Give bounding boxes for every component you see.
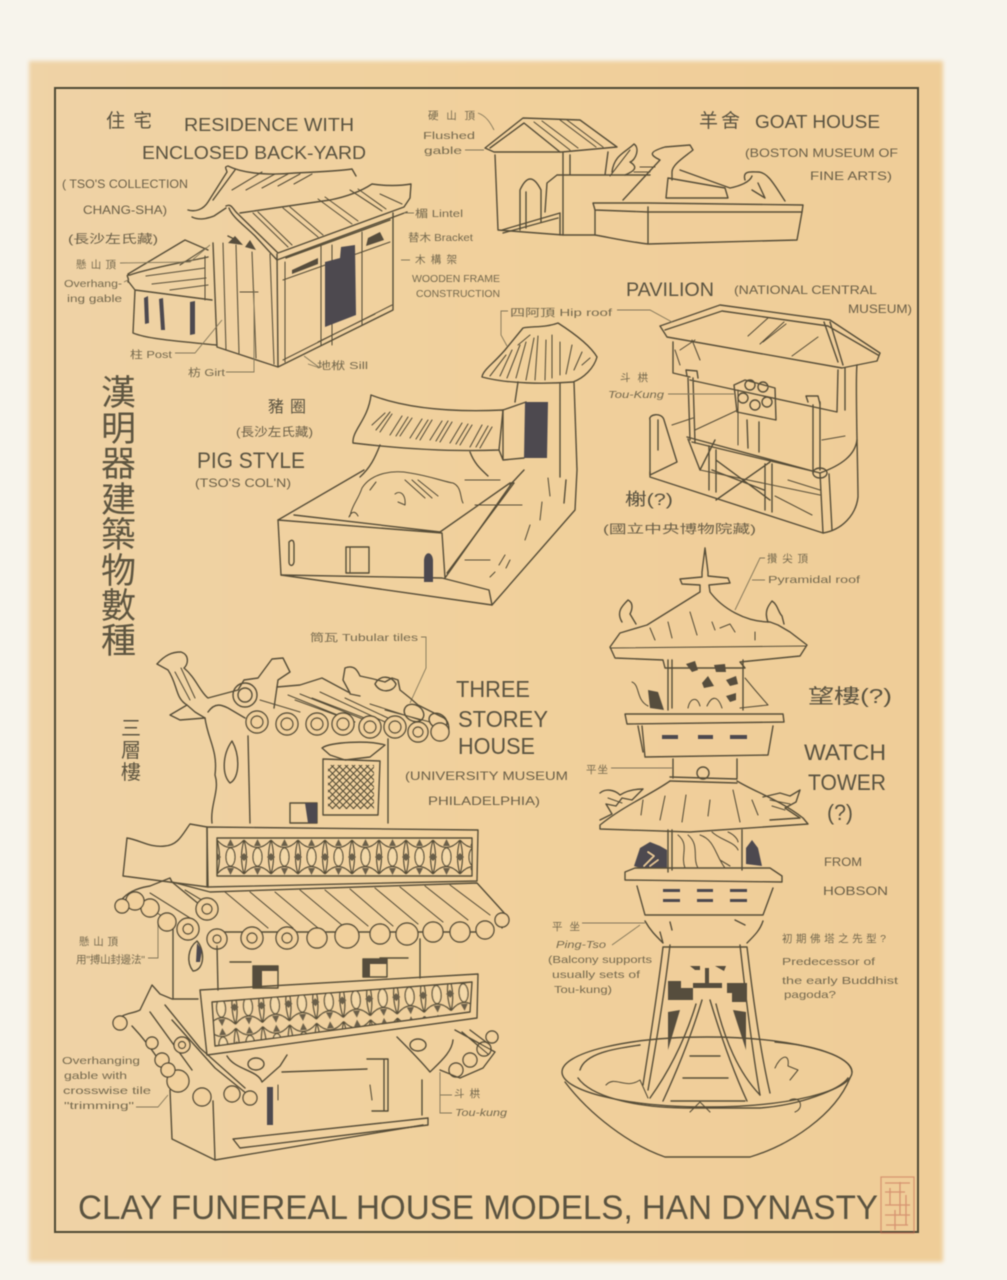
watch tower callouts: 攢尖頂 — [767, 552, 808, 565]
vertical chinese title: 數 — [101, 587, 136, 626]
pig style heading — [195, 398, 313, 490]
vertical chinese title: 器 — [101, 445, 136, 484]
three storey callouts: 斗栱 — [454, 1087, 480, 1100]
vertical chinese title: 明 — [101, 410, 136, 449]
pavilion callouts: (國立中央博物院藏) — [603, 521, 756, 536]
watch tower heading: WATCH — [804, 740, 886, 765]
watch tower callouts: Pyramidal roof — [768, 574, 860, 586]
hip roof callout: 四阿頂 Hip roof — [510, 307, 612, 319]
pavilion callouts: 斗栱 — [620, 371, 648, 384]
three storey label: vertical chinese: 樓 — [121, 761, 141, 784]
residence callouts: WOODEN FRAME — [412, 273, 500, 285]
residence callouts: 地栿 Sill — [317, 359, 368, 372]
middle wall — [173, 929, 420, 999]
lower balcony — [625, 868, 782, 882]
upper balcony — [625, 714, 784, 724]
lower roof and base — [113, 985, 498, 1160]
watch tower drawing — [562, 548, 852, 1157]
pig style heading: 豬圈 — [268, 398, 306, 416]
vertical chinese title: 種 — [101, 622, 136, 661]
three storey heading: PHILADELPHIA) — [428, 794, 540, 808]
heading: goat house: FINE ARTS) — [810, 169, 892, 183]
three storey callouts — [62, 632, 507, 1119]
residence callouts: 替木 Bracket — [408, 231, 473, 244]
pavilion callouts: Tou-Kung — [608, 389, 664, 401]
residence callouts: Overhang- — [64, 278, 123, 290]
three storey heading: STOREY — [458, 706, 548, 732]
residence callouts: 懸山頂 — [76, 258, 116, 271]
red seal — [881, 1177, 914, 1233]
vertical chinese title: 物 — [101, 552, 136, 591]
upper wall — [205, 718, 388, 823]
watch tower heading: FROM — [824, 855, 862, 869]
pavilion callouts — [603, 371, 756, 536]
residence source notes: (長沙左氏藏) — [68, 231, 158, 246]
residence source notes — [62, 177, 188, 246]
three storey callouts: gable with — [64, 1070, 127, 1082]
three storey label: vertical chinese: 三 — [121, 718, 141, 740]
three storey callouts: 懸山頂 — [79, 935, 118, 948]
residence callouts: ing gable — [67, 293, 122, 305]
pig style heading: PIG STYLE — [197, 448, 305, 473]
heading: residence: RESIDENCE WITH — [184, 115, 354, 135]
watch tower heading: TOWER — [808, 770, 886, 795]
vertical chinese title: 建 — [101, 481, 136, 520]
residence source notes: ( TSO'S COLLECTION — [62, 177, 188, 191]
residence callouts — [64, 207, 500, 379]
pavilion drawing — [650, 305, 880, 533]
watch tower callouts: 初期佛塔之先型? — [782, 932, 886, 945]
waist — [670, 759, 737, 783]
heading: residence — [106, 110, 366, 163]
middle roof — [115, 878, 509, 949]
three storey heading — [405, 676, 568, 808]
lower balcony — [200, 974, 478, 1055]
dish — [562, 1037, 852, 1107]
vertical chinese title — [101, 374, 136, 661]
watch tower callouts: the early Buddhist — [782, 975, 898, 987]
three storey callouts: "trimming" — [64, 1100, 134, 1112]
watch tower callouts: pagoda? — [784, 989, 836, 1001]
upper room — [668, 660, 743, 710]
three storey callouts: 筒瓦 Tubular tiles — [310, 632, 418, 644]
heading: residence: ENCLOSED BACK-YARD — [142, 143, 366, 163]
sheet content — [55, 88, 918, 1233]
pig style heading: (長沙左氏藏) — [236, 424, 313, 439]
watch tower heading: (?) — [827, 800, 853, 825]
pavilion heading: MUSEUM) — [848, 302, 912, 316]
watch tower callouts: Tou-kung) — [554, 984, 612, 996]
upper roof — [610, 548, 807, 668]
residence callouts: 枋 Girt — [188, 366, 225, 379]
watch tower callouts: usually sets of — [552, 969, 640, 981]
lower room — [668, 830, 742, 872]
goat house callouts: Flushed — [423, 130, 475, 142]
three storey house drawing — [113, 652, 509, 1160]
residence callouts: CONSTRUCTION — [416, 288, 500, 300]
goat house callouts — [423, 110, 494, 157]
goat house callouts: 硬山頂 — [428, 110, 476, 122]
heading: goat house: GOAT HOUSE — [755, 112, 880, 132]
vertical chinese title: 漢 — [101, 374, 136, 413]
residence callouts: 柱 Post — [130, 348, 172, 361]
heading: goat house: (BOSTON MUSEUM OF — [745, 146, 898, 160]
three storey heading: (UNIVERSITY MUSEUM — [405, 769, 568, 783]
watch tower heading: HOBSON — [823, 884, 888, 898]
watch tower heading: 望樓(?) — [808, 685, 892, 708]
watch tower callouts: (Balcony supports — [548, 954, 652, 966]
hip roof callout — [501, 307, 672, 346]
three storey heading: THREE — [456, 676, 530, 702]
three storey callouts: Tou-kung — [455, 1107, 507, 1119]
vertical chinese title: 築 — [101, 516, 136, 555]
heading: residence: 住宅 — [106, 110, 152, 132]
watch tower callouts: 平坐 — [586, 764, 608, 776]
heading: goat house: 羊舍 — [699, 110, 740, 132]
goat house drawing — [485, 118, 803, 244]
three storey heading: HOUSE — [458, 733, 535, 759]
lower roof — [600, 781, 808, 832]
goat house callouts: gable — [424, 145, 462, 157]
watch tower callouts: Predecessor of — [782, 956, 875, 968]
top roof — [157, 652, 449, 742]
three storey callouts: Overhanging — [62, 1055, 140, 1067]
watch tower callouts: 平坐 — [552, 921, 580, 933]
base — [643, 945, 770, 1095]
pavilion heading: (NATIONAL CENTRAL — [734, 283, 877, 297]
heading: goat house — [699, 110, 898, 183]
residence callouts: 楣 Lintel — [415, 207, 463, 220]
three storey callouts: crosswise tile — [63, 1085, 151, 1097]
upper balcony — [123, 824, 478, 887]
pavilion heading — [626, 280, 912, 316]
residence source notes: CHANG-SHA) — [83, 203, 167, 217]
three storey callouts: 用"搏山封邊法" — [76, 953, 145, 966]
three storey label: vertical chinese: 層 — [121, 740, 141, 762]
frame border — [55, 88, 918, 1232]
main title: CLAY FUNEREAL HOUSE MODELS, HAN DYNASTY — [78, 1189, 878, 1227]
three storey label: vertical chinese — [121, 718, 141, 784]
pavilion callouts: 榭(?) — [625, 490, 673, 509]
watch tower callouts — [548, 552, 898, 1001]
residence callouts: 木構架 — [415, 253, 457, 266]
residence drawing — [127, 166, 411, 367]
watch tower heading — [804, 685, 892, 898]
watch tower callouts: Ping-Tso — [556, 939, 606, 951]
pavilion heading: PAVILION — [626, 280, 714, 301]
pig style drawing — [278, 323, 597, 605]
pig style heading: (TSO'S COL'N) — [195, 476, 291, 490]
